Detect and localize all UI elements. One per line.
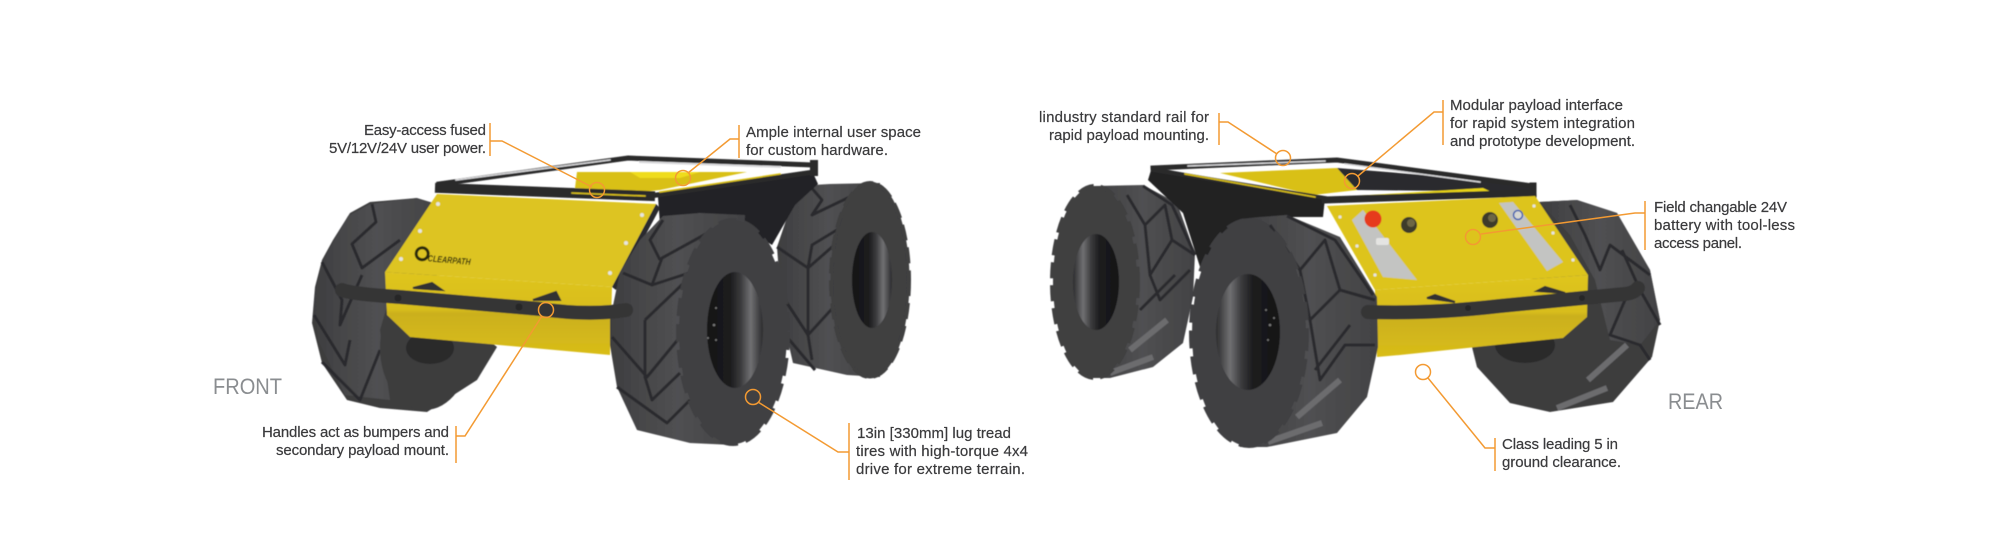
callout: tires: tires with high-torque 4x4 — [856, 443, 1028, 460]
payload bay interior — [575, 172, 747, 192]
callout: handles: secondary payload mount. — [276, 442, 449, 459]
rear robot illustration — [1052, 160, 1660, 447]
bumper handle — [342, 283, 626, 313]
callout: user power: 5V/12V/24V user power. — [329, 140, 486, 157]
label: REAR: REAR — [1668, 389, 1723, 414]
callout: user power: Easy-access fused — [364, 122, 486, 139]
callout: battery: Field changable 24V — [1654, 199, 1787, 216]
rail frame — [439, 158, 814, 196]
connector — [1514, 210, 1522, 220]
callout: battery: access panel. — [1654, 235, 1742, 252]
rail frame — [1153, 160, 1533, 200]
callout: payload interface: Modular payload interface — [1450, 97, 1623, 114]
callout: rail: rapid payload mounting. — [1049, 127, 1209, 144]
rear-left tire on rear view — [1052, 185, 1195, 378]
callout: handles — [262, 302, 554, 463]
callout: ground clearance: Class leading 5 in — [1502, 436, 1618, 453]
front-right tire — [610, 213, 788, 445]
callout: ground clearance — [1416, 364, 1621, 471]
yellow body — [1327, 196, 1588, 357]
callout: battery — [1466, 199, 1795, 252]
callout: handles: Handles act as bumpers and — [262, 424, 449, 441]
rear-right tire — [777, 183, 909, 377]
callout: internal space: for custom hardware. — [746, 142, 888, 159]
bumper handle — [1368, 287, 1638, 312]
callout: payload interface: and prototype development. — [1450, 133, 1635, 150]
callout: rail: lindustry standard rail for — [1039, 109, 1209, 126]
front-left tire on rear view — [1191, 215, 1378, 447]
callout: battery: battery with tool-less — [1654, 217, 1795, 234]
callout: tires: drive for extreme terrain. — [856, 461, 1025, 478]
front robot illustration — [312, 158, 909, 445]
knobs — [1401, 212, 1498, 233]
label: FRONT: FRONT — [213, 374, 282, 399]
callout: payload interface: for rapid system integration — [1450, 115, 1635, 132]
callout: rail — [1039, 109, 1290, 166]
callout: ground clearance: ground clearance. — [1502, 454, 1621, 471]
emergency stop button — [1364, 210, 1382, 228]
clearpath logo: CLEARPATH — [427, 253, 471, 267]
rear-left tire — [312, 198, 497, 412]
grey plates — [1352, 210, 1417, 280]
callout: tires: 13in [330mm] lug tread — [857, 425, 1011, 442]
callout: tires — [746, 390, 1028, 480]
callout: payload interface — [1344, 97, 1635, 188]
clearpath logo — [415, 247, 472, 267]
payload bay interior — [1220, 168, 1357, 195]
callout: user power — [329, 122, 604, 198]
callout: internal space — [676, 124, 921, 186]
callout: internal space: Ample internal user space — [746, 124, 921, 141]
yellow body — [385, 194, 660, 355]
rear-right tire on rear view — [1472, 200, 1660, 412]
black side panel — [1148, 167, 1325, 267]
black side panel — [658, 173, 818, 245]
